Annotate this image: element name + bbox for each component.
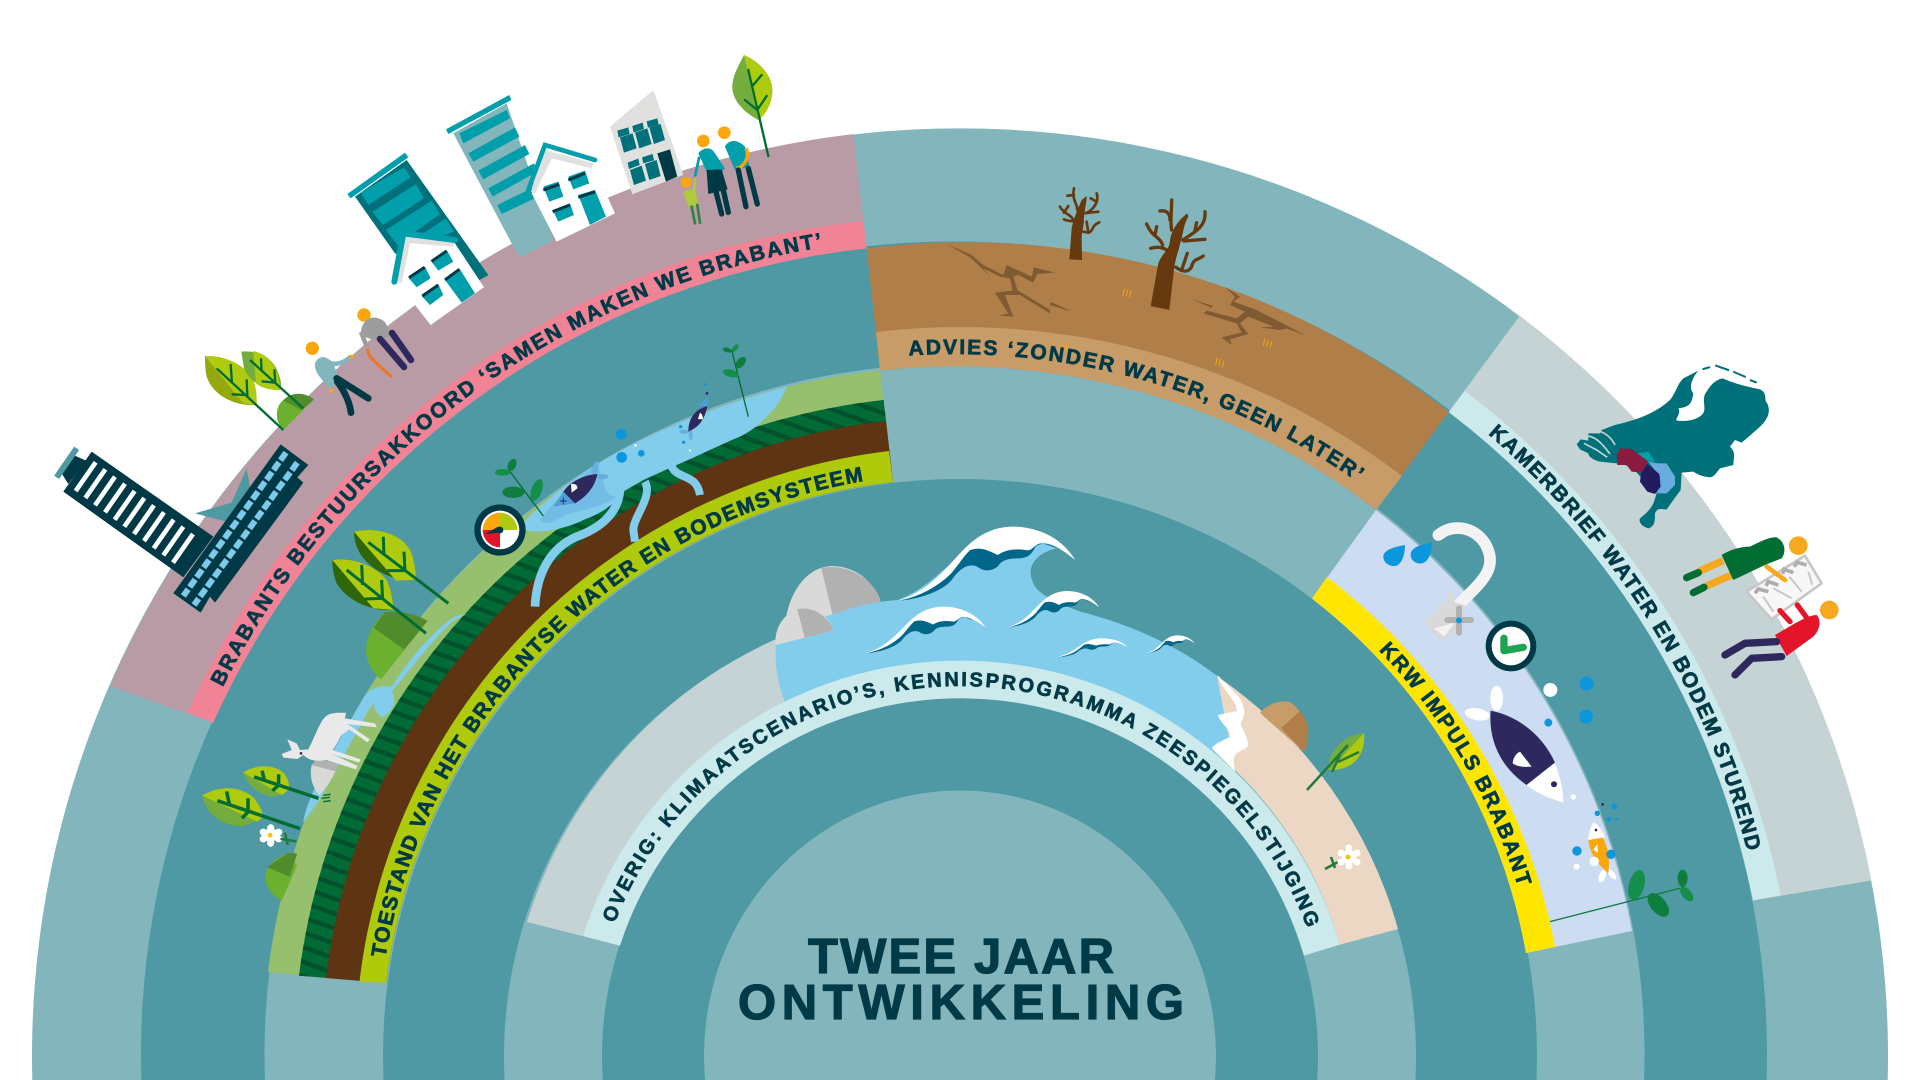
brown soil layer xyxy=(326,421,893,983)
house one xyxy=(394,233,484,325)
grey rock small xyxy=(775,608,833,645)
orange arm xyxy=(1767,567,1785,580)
light apartment xyxy=(446,95,553,257)
river body xyxy=(520,387,787,532)
panel: Brabants bestuursakkoord sector xyxy=(110,134,867,723)
panel: Kamerbrief sector xyxy=(1449,316,1871,900)
dead tree large xyxy=(1147,200,1205,310)
pink label band xyxy=(188,221,867,723)
label: Brabants bestuursakkoord: BRABANTS BESTUURSAKKOORD ‘SAMEN MAKEN WE BRABANT’ xyxy=(210,232,820,686)
title: ONTWIKKELING xyxy=(738,976,1184,1030)
leaf A xyxy=(354,530,448,603)
person in green xyxy=(1687,536,1808,593)
deer body xyxy=(282,713,377,769)
river and water streams xyxy=(474,343,787,607)
grey rock large xyxy=(784,566,881,643)
gauge icon xyxy=(474,504,526,556)
wave 3 xyxy=(1007,591,1099,627)
stripes on green layer xyxy=(299,400,886,978)
branch xyxy=(1550,868,1696,922)
wave 4 xyxy=(1055,638,1128,658)
map of the Netherlands xyxy=(1577,366,1769,528)
KRW illustrations xyxy=(1383,528,1696,922)
person with walking stick xyxy=(357,308,411,377)
tower diagonal xyxy=(173,444,308,613)
bubbles xyxy=(616,383,709,463)
checklist xyxy=(1747,556,1822,619)
left vegetation and water strip xyxy=(202,612,468,901)
bubbles xyxy=(1543,677,1618,822)
dry grass ticks xyxy=(1059,288,1272,367)
pale label band xyxy=(1449,391,1781,900)
Netherlands map and people xyxy=(1577,366,1839,675)
water drops xyxy=(1383,543,1432,566)
leaf B xyxy=(332,559,426,633)
small leaf one xyxy=(243,766,318,798)
pale label band: overig xyxy=(583,661,1340,956)
person with orange head xyxy=(306,342,368,413)
bush on mauve edge xyxy=(277,394,314,430)
leaf stems xyxy=(217,358,303,430)
houses and family group xyxy=(347,55,772,325)
water strip xyxy=(303,614,468,822)
plant right xyxy=(722,343,748,417)
foam xyxy=(1212,675,1248,772)
streams through soil xyxy=(535,467,700,607)
title xyxy=(738,930,1184,1030)
panel: Advies zonder water sector xyxy=(867,242,1449,510)
water body xyxy=(776,537,1240,770)
bush upper xyxy=(366,612,427,679)
crack right xyxy=(1192,287,1307,345)
grass tufts xyxy=(322,794,331,802)
tree leaves on dark ring and tower group xyxy=(57,342,448,633)
panel: KRW impuls sector xyxy=(1312,510,1632,953)
tower horizontal xyxy=(57,448,213,577)
teal roof star xyxy=(195,468,250,522)
wave 2 xyxy=(865,607,986,653)
yellow label band xyxy=(1312,577,1555,953)
panel: climate scenario sector, grey part xyxy=(527,639,790,946)
label: toestand: TOESTAND VAN HET BRABANTSE WATER EN BODEMSYSTEEM xyxy=(370,466,863,956)
tree xyxy=(732,55,772,156)
leaf top one xyxy=(205,356,257,405)
deer eye xyxy=(300,752,302,755)
faucet xyxy=(1423,528,1490,641)
icon: sand rock xyxy=(1260,701,1308,752)
shade around fish xyxy=(540,463,617,523)
tan label band xyxy=(876,327,1402,510)
check icon xyxy=(1486,621,1536,671)
plant left xyxy=(495,457,546,516)
deer on rock xyxy=(282,713,377,802)
house two xyxy=(528,145,615,242)
big wave xyxy=(898,527,1075,601)
tall grey house xyxy=(610,90,683,194)
label: Kamerbrief: KAMERBRIEF WATER EN BODEM STUREND xyxy=(1488,424,1760,850)
icon: daisy on beach xyxy=(1325,844,1360,870)
label: KRW impuls: KRW IMPULS BRABANT xyxy=(1379,640,1532,884)
person in red xyxy=(1725,601,1839,675)
bush lower xyxy=(265,853,297,901)
wave 5 xyxy=(1146,635,1195,653)
panel: soil system sector xyxy=(268,370,893,983)
beach xyxy=(1217,676,1398,945)
dead tree small xyxy=(1060,188,1099,260)
teal apartment xyxy=(347,153,488,282)
grey rock under deer xyxy=(311,761,338,795)
yellow-green label band xyxy=(360,451,893,983)
title: TWEE JAAR xyxy=(808,930,1114,984)
dark green soil layer xyxy=(299,400,893,983)
fish one xyxy=(553,460,608,507)
sea water with waves xyxy=(775,527,1240,770)
daisy xyxy=(260,824,296,847)
big fish xyxy=(1464,686,1563,803)
label: Advies: ADVIES ‘ZONDER WATER, GEEN LATER’ xyxy=(908,339,1365,478)
crack left xyxy=(947,244,1072,317)
label: overig: OVERIG: KLIMAATSCENARIO’S, KENNISPROGRAMMA ZEESPIEGELSTIJGING xyxy=(604,672,1318,927)
family xyxy=(681,126,757,223)
leaf top two xyxy=(241,351,281,390)
icon: leaf on beach xyxy=(1307,733,1364,790)
small leaf two xyxy=(202,788,300,829)
dead trees and cracks in dry soil xyxy=(947,188,1307,367)
fish two xyxy=(679,397,709,440)
small orange fish xyxy=(1572,822,1618,883)
